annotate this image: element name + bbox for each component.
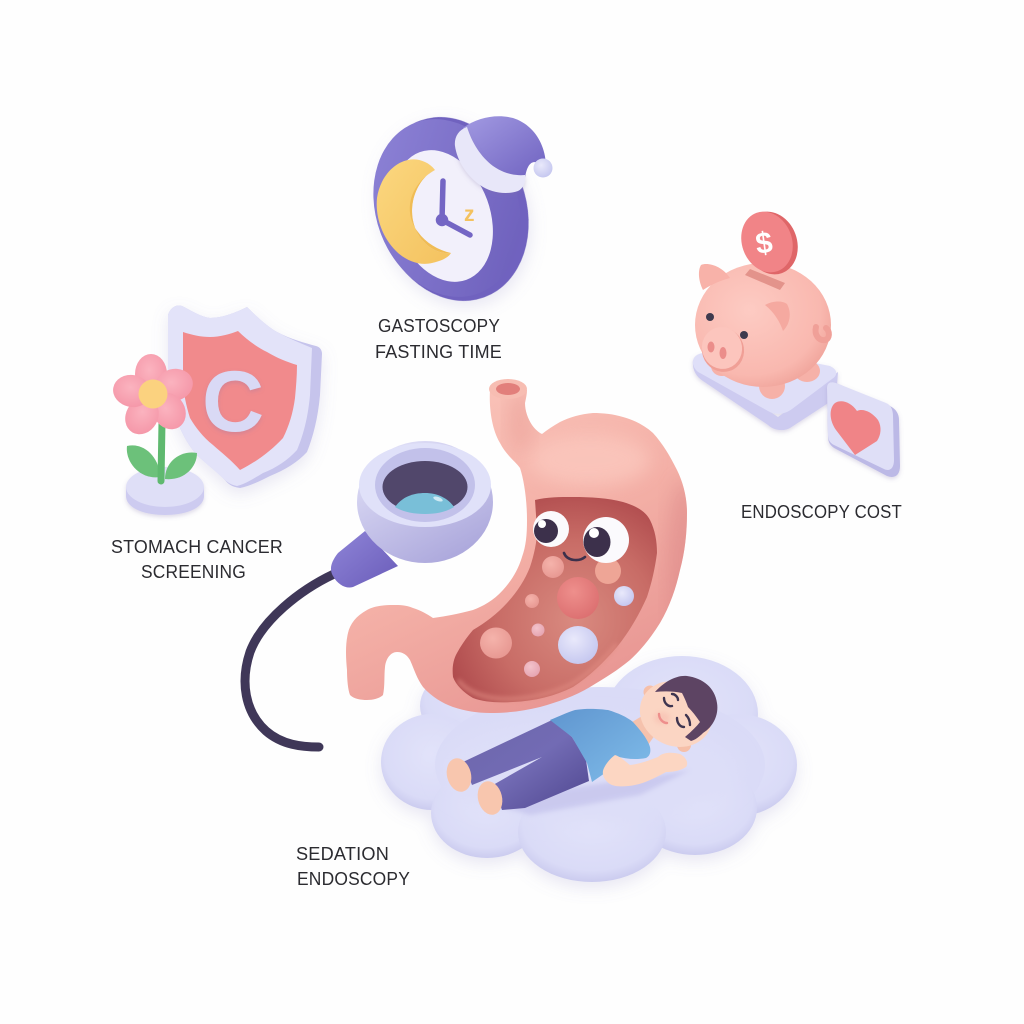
coin slot xyxy=(745,269,785,290)
mouth xyxy=(564,553,585,560)
icon: shield with flower xyxy=(111,305,322,515)
stomach interior xyxy=(453,497,657,702)
esophagus opening xyxy=(489,379,527,399)
flower base xyxy=(126,467,204,515)
pig body xyxy=(695,263,831,387)
pants xyxy=(463,720,589,810)
sleep letter z: z xyxy=(464,203,474,226)
label: sedation endoscopy: ENDOSCOPY xyxy=(297,869,410,889)
label: gastroscopy fasting time: FASTING TIME xyxy=(375,342,502,362)
endoscope lens opening xyxy=(382,461,468,514)
neck xyxy=(632,716,655,745)
flower centre xyxy=(138,380,168,408)
icon: piggy bank xyxy=(693,204,900,477)
moon inner bevel xyxy=(410,170,451,253)
illustration: stomach character xyxy=(346,379,700,713)
left eye xyxy=(533,511,569,547)
pig tail xyxy=(816,327,829,340)
clock hands xyxy=(438,181,470,235)
lower rim light xyxy=(458,644,617,699)
shield red panel xyxy=(183,331,297,470)
stomach body xyxy=(346,390,700,713)
smile xyxy=(659,714,667,723)
coin with dollar sign: $ xyxy=(754,226,775,261)
endoscope cable xyxy=(245,574,334,747)
endoscope neck xyxy=(331,531,398,588)
hair xyxy=(655,676,717,741)
cloud xyxy=(381,656,797,882)
pig snout xyxy=(696,322,750,377)
nightcap xyxy=(455,116,552,193)
pig eyes xyxy=(706,313,714,321)
heart card xyxy=(827,382,900,477)
endoscope rim xyxy=(359,443,491,527)
label: gastroscopy fasting time: GASTOSCOPY xyxy=(378,316,500,336)
bubbles xyxy=(480,556,634,677)
arm xyxy=(603,753,687,786)
icon: alarm clock with nightcap xyxy=(349,95,554,323)
platform xyxy=(693,352,838,430)
feet xyxy=(443,756,475,794)
closed eyes xyxy=(664,694,690,727)
label: endoscopy cost: ENDOSCOPY COST xyxy=(741,502,902,522)
shield body xyxy=(168,305,322,488)
cheek blush xyxy=(654,712,670,724)
coin with dollar sign xyxy=(733,204,806,282)
head xyxy=(629,669,723,759)
pig legs xyxy=(711,356,820,399)
heart xyxy=(831,401,881,455)
shirt xyxy=(550,709,650,782)
label: sedation endoscopy: SEDATION xyxy=(296,844,389,864)
shadow under patient xyxy=(480,770,690,815)
endoscope head xyxy=(357,441,493,563)
stem xyxy=(161,422,162,481)
petals xyxy=(111,354,196,440)
right eye xyxy=(583,517,629,563)
letter C: C xyxy=(202,354,264,450)
patient xyxy=(443,669,723,817)
illustration: cloud with sleeping patient xyxy=(381,656,797,882)
label: stomach cancer screening: STOMACH CANCER xyxy=(111,537,283,557)
pig ear back xyxy=(699,264,730,290)
flower xyxy=(111,354,204,515)
label: stomach cancer screening: SCREENING xyxy=(141,562,246,582)
illustration: endoscope xyxy=(245,441,493,747)
icon: crescent moon xyxy=(377,159,451,264)
leaves xyxy=(127,445,160,477)
pig ear front xyxy=(765,301,790,331)
